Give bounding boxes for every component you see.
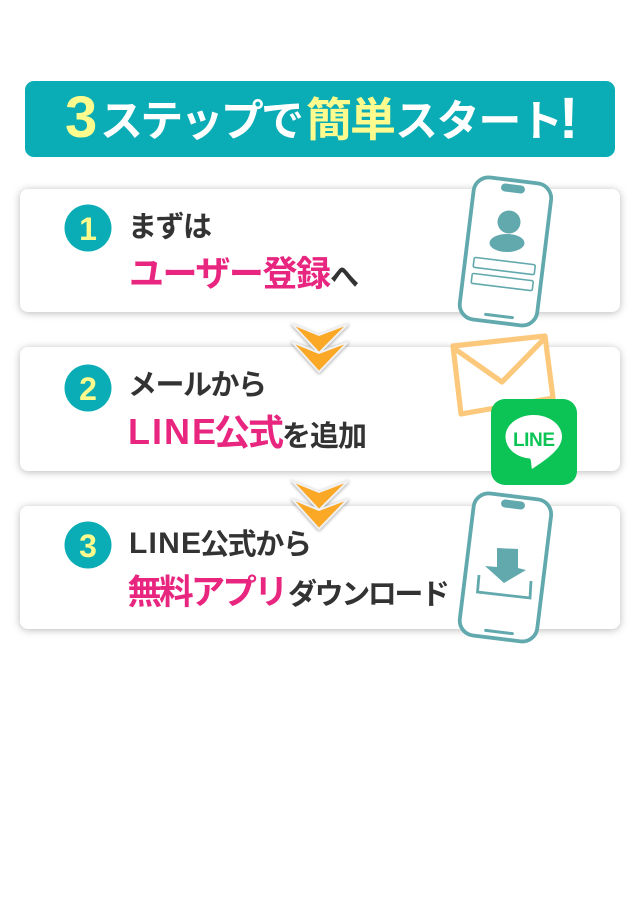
step 2 text: を追加 bbox=[282, 420, 367, 453]
step 1 number badge bbox=[64, 204, 112, 252]
step 1 text: へ bbox=[330, 262, 359, 294]
step 3 text: LINE bbox=[129, 527, 201, 560]
arrow: step 1 to step 2 bbox=[292, 324, 348, 372]
title text bbox=[65, 85, 578, 151]
step 2 text: 公式 bbox=[214, 412, 284, 453]
title text: 3 bbox=[65, 85, 97, 150]
panel: step 3 card bbox=[20, 506, 620, 629]
panel: step 2 card bbox=[20, 347, 620, 471]
icon: LINE logo bbox=[491, 399, 577, 485]
step 2 text bbox=[128, 370, 367, 453]
step 3 text: ダウンロード bbox=[288, 577, 450, 611]
icon: phone with download bbox=[458, 492, 553, 643]
icon: envelope bbox=[453, 336, 553, 414]
step 3 text: 公式から bbox=[200, 528, 312, 561]
title text: ステップで bbox=[100, 98, 304, 146]
title banner bbox=[25, 81, 615, 157]
step 1 number badge: 1 bbox=[79, 211, 97, 247]
step 2 number badge bbox=[64, 364, 112, 412]
step 1 text: ユーザー登録 bbox=[129, 255, 331, 294]
title text: ! bbox=[559, 86, 578, 151]
step 2 text: LINE bbox=[128, 411, 216, 452]
step 3 number badge: 3 bbox=[79, 528, 97, 564]
step 3 number badge bbox=[64, 522, 112, 568]
icon: LINE logo: LINE bbox=[513, 430, 555, 451]
title text: スタート bbox=[395, 98, 563, 146]
step 2 text: メールから bbox=[128, 370, 267, 402]
panel: step 1 card bbox=[20, 189, 620, 312]
title text: 簡単 bbox=[306, 94, 396, 146]
step 2 number badge: 2 bbox=[79, 371, 97, 407]
step 1 text: まずは bbox=[128, 210, 212, 244]
step 1 text bbox=[128, 210, 359, 294]
step 3 text: 無料アプリ bbox=[128, 574, 288, 612]
arrow: step 2 to step 3 bbox=[292, 481, 348, 529]
step 3 text bbox=[128, 527, 450, 612]
icon: phone with user registration bbox=[458, 176, 553, 327]
